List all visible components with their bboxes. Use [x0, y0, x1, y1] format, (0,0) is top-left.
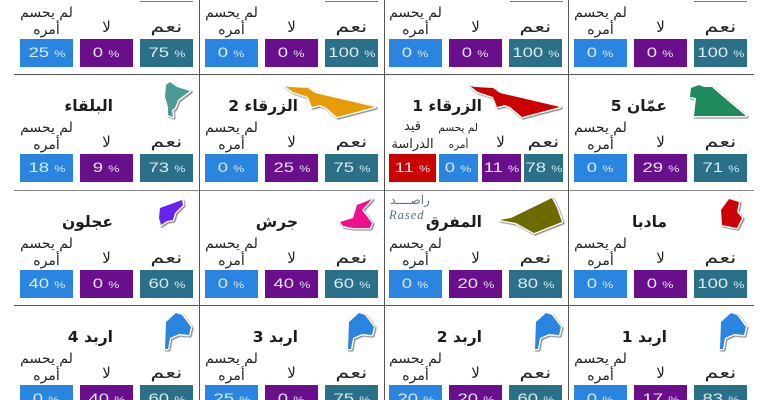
icon: Balqa map	[164, 81, 194, 120]
label: undecided	[205, 351, 258, 385]
value: yes: 100 %	[512, 44, 559, 60]
panel: Zarqa 1	[389, 86, 564, 182]
value: no: 0 %	[462, 44, 489, 60]
label: no: لا	[471, 364, 480, 382]
value: undecided	[389, 385, 442, 400]
label: no: لا	[287, 18, 296, 36]
label: undecided	[20, 351, 73, 385]
label: undecided	[205, 5, 258, 38]
value: no: 0 %	[278, 44, 305, 60]
label: undecided: أمره	[402, 22, 429, 38]
label: undecided: لم يحسم	[205, 236, 258, 252]
icon: Mafraq map	[498, 197, 566, 236]
value: no	[80, 385, 133, 400]
value: undecided: 0 %	[218, 159, 245, 175]
title: اربد 4	[68, 328, 113, 346]
panel: Amman 5	[574, 84, 750, 182]
label: yes: نعم	[151, 363, 182, 382]
value: yes	[509, 39, 562, 66]
label: undecided: أمره	[33, 368, 60, 384]
label: undecided: أمره	[402, 253, 429, 269]
value: yes	[140, 39, 193, 66]
label: undecided	[574, 120, 627, 153]
label: undecided: لم يحسم	[389, 351, 442, 367]
value: undecided	[20, 39, 73, 66]
icon: Madaba map	[716, 194, 747, 233]
value: no: 25 %	[273, 159, 310, 175]
value: no	[265, 385, 318, 400]
panel: Irbid 2	[389, 270, 563, 400]
label: undecided: أمره	[218, 368, 245, 384]
value: yes: 80 %	[517, 275, 554, 291]
panel: Mafraq	[388, 193, 566, 298]
icon: Ajloun map	[159, 199, 186, 228]
value: under study	[389, 154, 436, 182]
value: yes	[694, 385, 747, 400]
label: undecided: لم يحسم	[20, 351, 73, 367]
value: undecided	[20, 270, 73, 298]
label: undecided: لم يحسم	[574, 5, 627, 21]
icon: Zarqa 1 map	[468, 86, 564, 120]
value: undecided	[574, 154, 627, 182]
label: no: لا	[102, 249, 111, 267]
label: yes: نعم	[151, 132, 182, 151]
label: undecided	[205, 236, 258, 269]
value: yes: 100 %	[328, 44, 375, 60]
value: yes: 73 %	[148, 159, 185, 175]
value: yes	[140, 385, 193, 400]
value: yes	[694, 270, 747, 298]
value: yes: 75 %	[148, 44, 185, 60]
title: عمّان 5	[611, 97, 667, 115]
title: مادبا	[632, 213, 667, 231]
label: yes: نعم	[520, 248, 551, 267]
label: undecided: أمره	[587, 253, 614, 269]
panel: Irbid 1	[574, 270, 748, 400]
label: under study: قيد	[404, 119, 421, 134]
label: no: لا	[287, 364, 296, 382]
label: undecided: لم يحسم	[20, 236, 73, 252]
label: undecided	[205, 120, 258, 153]
label: undecided	[389, 236, 442, 270]
value: undecided: 40 %	[28, 275, 65, 291]
panel: Irbid 4	[20, 270, 194, 400]
label: undecided: لم يحسم	[205, 351, 258, 367]
value: yes	[524, 154, 563, 182]
label: undecided: لم يحسم	[20, 5, 73, 21]
title: المفرق	[426, 213, 482, 231]
value: no	[265, 270, 318, 298]
value: yes	[694, 39, 747, 66]
title: البلقاء	[64, 97, 113, 115]
value: no	[265, 39, 318, 66]
value: no: 0 %	[93, 44, 120, 60]
value: yes: 78 %	[525, 159, 562, 175]
value: undecided: 0 %	[587, 44, 614, 60]
label: yes: نعم	[151, 17, 182, 36]
value: undecided: 0 %	[445, 159, 472, 175]
label: under study: الدراسة	[391, 137, 434, 152]
value: no	[80, 270, 133, 298]
value: no: 40 %	[273, 275, 310, 291]
value: undecided: 0 %	[402, 44, 429, 60]
label: undecided: لم يحسم	[574, 236, 627, 252]
label: no: لا	[656, 364, 665, 382]
value: undecided	[389, 39, 442, 66]
label: undecided	[20, 120, 73, 153]
label: no: لا	[102, 18, 111, 36]
value: undecided: 25 %	[28, 44, 65, 60]
value: undecided: 0 %	[218, 275, 245, 291]
label: undecided: لم يحسم	[574, 120, 627, 136]
value: yes	[140, 154, 193, 182]
value: undecided	[205, 385, 258, 400]
panel: Jerash	[205, 198, 378, 298]
value: undecided: 0 %	[218, 44, 245, 60]
panel: top row column 2	[205, 5, 378, 67]
logo: Rased	[388, 193, 430, 222]
label: yes: نعم	[336, 17, 367, 36]
value: no	[80, 39, 133, 66]
label: undecided	[574, 351, 627, 385]
label: yes: نعم	[151, 248, 182, 267]
label: undecided: لم يحسم	[389, 5, 442, 21]
label: undecided: لم يحسم	[205, 120, 258, 136]
value: yes: 100 %	[697, 44, 744, 60]
value: undecided	[574, 385, 627, 400]
value: no	[265, 154, 318, 182]
label: undecided: أمره	[218, 137, 245, 153]
label: undecided: لم يحسم	[205, 5, 258, 21]
value: undecided: 18 %	[28, 159, 65, 175]
panel: top row column 3	[389, 5, 562, 67]
label: undecided: لم يحسم	[438, 122, 478, 134]
value: yes: 75 %	[333, 159, 370, 175]
label: yes: نعم	[520, 17, 551, 36]
label: undecided	[389, 5, 442, 38]
value: no: 0 %	[647, 275, 674, 291]
panel: Zarqa 2	[205, 86, 378, 182]
label: no: لا	[471, 18, 480, 36]
value: undecided	[205, 39, 258, 66]
value: undecided	[389, 270, 442, 298]
label: undecided: أمره	[33, 253, 60, 269]
value: no: 0 %	[647, 44, 674, 60]
label: yes: نعم	[520, 363, 551, 382]
label: undecided: لم يحسم	[574, 351, 627, 367]
label: no: لا	[656, 133, 665, 151]
title: اربد 2	[437, 328, 482, 346]
title: اربد 3	[253, 328, 298, 346]
value: no: 29 %	[642, 159, 679, 175]
value: no	[634, 270, 687, 298]
label: undecided	[574, 5, 627, 38]
label: yes: نعم	[336, 248, 367, 267]
value: undecided	[574, 39, 627, 66]
value: yes	[325, 154, 378, 182]
label: undecided	[20, 5, 73, 38]
label: no: لا	[496, 133, 505, 151]
label: no: لا	[102, 364, 111, 382]
logo: Rased: Rased	[389, 208, 425, 222]
title: جرش	[256, 213, 298, 231]
value: no: 20 %	[457, 275, 494, 291]
panel: Balqa	[20, 81, 194, 182]
value: no	[80, 154, 133, 182]
label: yes: نعم	[705, 248, 736, 267]
label: undecided: أمره	[449, 139, 468, 151]
label: undecided	[438, 122, 478, 151]
value: undecided	[205, 270, 258, 298]
value: undecided: 0 %	[587, 159, 614, 175]
value: yes: 60 %	[148, 275, 185, 291]
panel: Irbid 3	[205, 270, 379, 400]
panel: top row column 4	[574, 5, 747, 67]
value: undecided: 0 %	[587, 275, 614, 291]
value: yes	[509, 385, 562, 400]
panel: Madaba	[574, 155, 748, 298]
label: undecided: أمره	[218, 253, 245, 269]
label: undecided: أمره	[587, 368, 614, 384]
value: under study: 11 %	[395, 159, 430, 175]
label: undecided: لم يحسم	[389, 236, 442, 252]
value: yes: 60 %	[333, 275, 370, 291]
label: no: لا	[656, 249, 665, 267]
label: no: لا	[287, 133, 296, 151]
icon: Irbid 1 map	[716, 308, 750, 355]
label: undecided	[389, 351, 442, 385]
value: no: 0 %	[93, 275, 120, 291]
icon: Jerash map	[338, 198, 376, 232]
value: no: 9 %	[93, 159, 120, 175]
label: no: لا	[471, 249, 480, 267]
value: no	[634, 385, 687, 400]
value: yes	[325, 39, 378, 66]
value: undecided	[205, 154, 258, 182]
label: no: لا	[656, 18, 665, 36]
icon: Irbid 2 map	[531, 308, 565, 355]
panel: Ajloun	[20, 199, 193, 298]
label: no: لا	[102, 133, 111, 151]
icon: Zarqa 2 map	[284, 86, 378, 120]
label: undecided: أمره	[402, 368, 429, 384]
value: yes	[509, 270, 562, 298]
value: no: 11 %	[483, 159, 519, 175]
value: undecided	[20, 154, 73, 182]
icon: Irbid 4 map	[161, 308, 195, 355]
value: undecided: 0 %	[402, 275, 429, 291]
value: no	[634, 39, 687, 66]
value: no	[634, 154, 687, 182]
logo: Rased: راصــــد	[390, 193, 430, 207]
label: undecided: أمره	[587, 137, 614, 153]
label: yes: نعم	[336, 363, 367, 382]
title: اربد 1	[622, 328, 667, 346]
value: yes	[325, 385, 378, 400]
label: yes: نعم	[528, 132, 559, 151]
value: no	[449, 270, 502, 298]
value: no	[449, 39, 502, 66]
value: no	[449, 385, 502, 400]
value: yes: 100 %	[697, 275, 744, 291]
value: no	[482, 154, 520, 182]
value: undecided	[439, 154, 478, 182]
label: undecided: أمره	[587, 22, 614, 38]
value: undecided	[574, 270, 627, 298]
label: undecided: أمره	[33, 22, 60, 38]
label: undecided: لم يحسم	[20, 120, 73, 136]
panel: top row column 1	[20, 5, 193, 67]
label: yes: نعم	[705, 132, 736, 151]
label: yes: نعم	[336, 132, 367, 151]
icon: Amman 5 map	[688, 84, 750, 120]
label: no: لا	[287, 249, 296, 267]
value: yes: 71 %	[702, 159, 739, 175]
label: yes: نعم	[705, 363, 736, 382]
value: yes	[325, 270, 378, 298]
title: الزرقاء 1	[412, 97, 482, 115]
label: under study	[391, 119, 434, 152]
label: undecided: أمره	[33, 137, 60, 153]
title: عجلون	[62, 213, 113, 231]
value: undecided	[20, 385, 73, 400]
label: undecided	[574, 236, 627, 270]
value: yes	[694, 154, 747, 182]
icon: Irbid 3 map	[344, 308, 378, 355]
title: الزرقاء 2	[228, 97, 298, 115]
label: yes: نعم	[705, 17, 736, 36]
label: undecided: أمره	[218, 22, 245, 38]
label: undecided	[20, 236, 73, 269]
value: yes	[140, 270, 193, 298]
